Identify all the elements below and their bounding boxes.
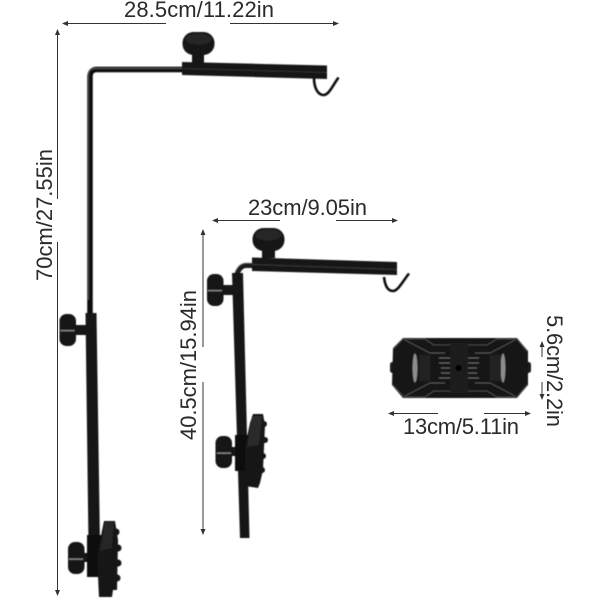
dimension: 40.5cm height [176,229,206,535]
lower tube [86,313,100,545]
middle knob [60,314,86,346]
hook [314,78,338,95]
short stand [207,228,409,538]
upper knob [207,274,233,306]
dimension: 13cm width: 13cm/5.11in [403,414,519,439]
dimension: 23cm width [212,195,398,223]
hook [384,274,409,291]
dimension: 70cm height [32,29,60,596]
top arm [182,62,327,79]
dimension: 28.5cm width [62,0,339,26]
dimension: 5.6cm height: 5.6cm/2.2in [542,315,567,427]
tall stand [60,32,338,597]
curved rod [236,266,252,275]
dimension: 40.5cm height: 40.5cm/15.94in [176,290,201,440]
side clamp [235,414,268,488]
top knob [182,32,214,63]
clamp plate top view [390,338,531,398]
dimension: 70cm height: 70cm/27.55in [32,149,57,281]
tube [232,273,250,538]
right wheel [501,354,505,382]
top knob [252,228,284,258]
centre block [450,343,468,393]
plate highlights [393,339,527,397]
left ribs [439,358,450,378]
right ribs [468,358,479,378]
arm [252,258,397,275]
plate body [392,338,528,398]
side nubs [390,362,396,373]
left wheel [413,354,417,382]
mounting hole [456,365,462,371]
bottom knob [68,542,91,574]
side clamp [87,521,122,597]
dimension: 23cm width: 23cm/9.05in [248,195,367,220]
top rod [90,70,184,316]
lower knob [216,436,238,468]
